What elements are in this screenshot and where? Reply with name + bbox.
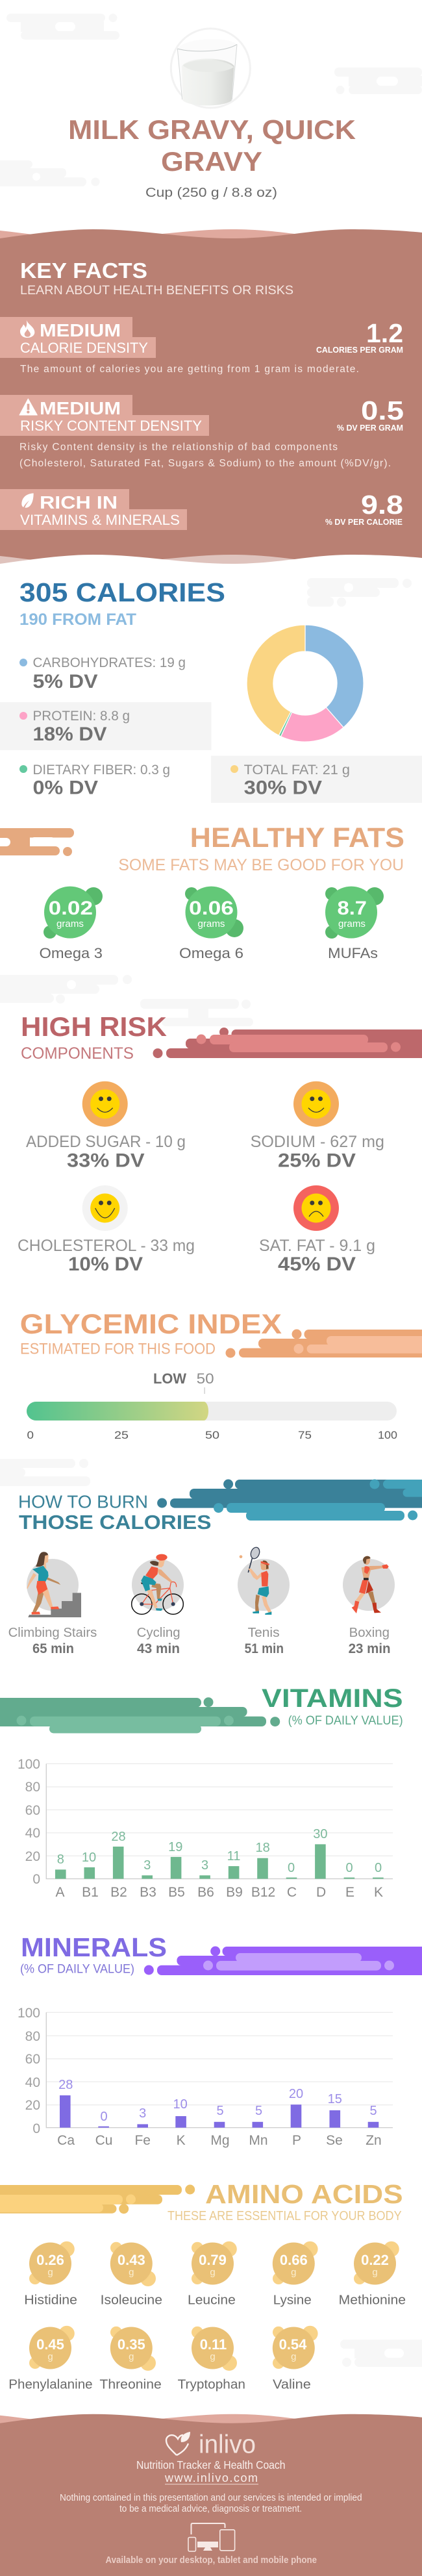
amino acid: leucine	[188, 2241, 237, 2308]
fact: rich in vitamins and minerals: RICH IN	[40, 492, 118, 512]
bar chart: vitamins: B2	[110, 1885, 127, 1900]
healthy fats subheading: SOME FATS MAY BE GOOD FOR YOU	[118, 856, 404, 874]
bar chart: vitamins: 8	[57, 1852, 64, 1867]
risk item: sodium: SODIUM - 627 mg	[251, 1133, 384, 1151]
bar chart: vitamins: 80	[25, 1780, 40, 1795]
activity: cycling	[132, 1554, 184, 1656]
bubble: MUFAs	[325, 887, 384, 961]
amino acid: isoleucine: g	[129, 2267, 134, 2278]
activity: cycling: 43 min	[137, 1641, 180, 1656]
bar chart: vitamins: 10	[82, 1850, 96, 1865]
bar chart: minerals: 0	[100, 2110, 108, 2124]
risk item: sodium	[251, 1081, 384, 1172]
bar chart: minerals: 5	[369, 2104, 377, 2118]
panel: how to burn those calories	[8, 1480, 422, 1656]
amino acid: threonine: g	[129, 2351, 134, 2362]
fact: risky content density: 0.5	[361, 396, 404, 425]
risk item: added sugar	[26, 1081, 186, 1172]
amino acid: histidine	[24, 2241, 77, 2308]
bar chart: vitamins: 3	[143, 1858, 151, 1873]
glycemic axis labels: 0	[27, 1429, 34, 1441]
panel: amino acids	[0, 2179, 406, 2392]
amino acid: methionine: Methionine	[339, 2293, 406, 2308]
icon: leaf	[21, 493, 34, 508]
bar chart: vitamins: 19	[168, 1840, 182, 1854]
vitamins subheading: (% OF DAILY VALUE)	[288, 1714, 403, 1728]
amino acid: lysine: Lysine	[273, 2293, 312, 2308]
bar chart: minerals: 10	[173, 2097, 188, 2112]
bar chart: vitamins: B3	[140, 1885, 156, 1900]
glycemic axis labels: 75	[298, 1429, 312, 1441]
serving size: Cup (250 g / 8.8 oz)	[145, 186, 277, 200]
minerals heading: MINERALS	[21, 1932, 167, 1962]
risk item: cholesterol	[18, 1185, 195, 1275]
disclaimer	[60, 2492, 362, 2514]
legend: carbohydrates	[19, 655, 186, 692]
background cloud: below glycemic index	[0, 1459, 90, 1486]
background cloud: calories	[307, 578, 412, 607]
bar chart: vitamins: 0	[345, 1861, 353, 1875]
fact: risky content density: Risky Content density is the relationship of bad components	[19, 442, 338, 453]
bar chart: minerals: 100	[18, 2006, 40, 2021]
disclaimer: to be a medical advice, diagnosis or treatment.	[119, 2503, 302, 2514]
bar chart: minerals: 60	[25, 2052, 40, 2067]
amino acid: valine	[273, 2326, 318, 2392]
glycemic index heading: GLYCEMIC INDEX	[20, 1309, 282, 1340]
risk item: saturated fat: SAT. FAT - 9.1 g	[259, 1237, 375, 1255]
fact: risky content density: MEDIUM	[40, 398, 121, 418]
bar chart: minerals: 20	[289, 2087, 303, 2101]
bar chart: minerals: 40	[25, 2075, 40, 2090]
burn heading line 2: THOSE CALORIES	[19, 1511, 212, 1534]
bar chart: vitamins: D	[316, 1885, 326, 1900]
activity: climbing stairs: 65 min	[32, 1641, 74, 1656]
fact: risky content density: RISKY CONTENT DENSITY	[20, 418, 202, 434]
bubble: omega 3: grams	[56, 918, 84, 929]
fact: risky content density: % DV PER GRAM	[337, 423, 403, 433]
amino acid: methionine	[339, 2241, 406, 2308]
bar chart: vitamins: 28	[111, 1830, 126, 1844]
panel: calories	[0, 577, 422, 803]
legend: protein	[19, 709, 130, 745]
amino acid: histidine: Histidine	[24, 2293, 77, 2308]
amino acids heading: AMINO ACIDS	[205, 2179, 403, 2209]
bar chart: minerals: 15	[328, 2092, 342, 2106]
legend: total fat	[230, 763, 350, 799]
availability note: Available on your desktop, tablet and mobile phone	[105, 2555, 317, 2566]
risk item: added sugar: 33% DV	[67, 1150, 145, 1172]
bar chart: vitamins: B5	[168, 1885, 185, 1900]
bar chart: vitamins: B9	[226, 1885, 243, 1900]
panel: vitamins	[0, 1684, 403, 1900]
bubble: omega 6	[179, 887, 243, 961]
bubble: omega 6: 0.06	[189, 898, 234, 919]
fact: calorie density	[0, 317, 403, 375]
risk item: cholesterol: 10% DV	[68, 1254, 143, 1275]
amino acid: isoleucine	[101, 2242, 162, 2308]
activity: boxing	[343, 1556, 395, 1656]
activity: cycling: Cycling	[137, 1626, 180, 1640]
risk item: cholesterol: CHOLESTEROL - 33 mg	[18, 1237, 195, 1255]
fact: risky content density: (Cholesterol, Saturated Fat, Sugars & Sodium) to the amount (%DV/gr).	[19, 458, 391, 469]
amino acid: phenylalanine: g	[47, 2351, 53, 2362]
bar chart: vitamins: 11	[227, 1849, 240, 1863]
fact: calorie density: CALORIES PER GRAM	[316, 346, 403, 355]
legend: protein: PROTEIN: 8.8 g	[32, 709, 130, 724]
panel: footer	[0, 2414, 422, 2576]
high risk heading: HIGH RISK	[21, 1011, 167, 1042]
bar chart: vitamins: B6	[197, 1885, 214, 1900]
healthy fats heading: HEALTHY FATS	[190, 822, 404, 853]
bar chart: minerals: Fe	[134, 2133, 151, 2148]
amino acid: valine: 0.54	[279, 2336, 307, 2353]
bar chart: vitamins: 18	[255, 1841, 270, 1855]
bar chart: minerals: 3	[139, 2106, 146, 2121]
calories from fat: 190 FROM FAT	[19, 611, 136, 629]
bar chart: minerals: Ca	[57, 2133, 75, 2148]
amino acid: isoleucine: 0.43	[118, 2252, 145, 2268]
bubble: MUFAs: 8.7	[338, 898, 367, 919]
calories heading: 305 CALORIES	[19, 577, 225, 607]
icon: devices	[188, 2523, 235, 2551]
glycemic value label	[153, 1370, 214, 1394]
fact: calorie density: 1.2	[366, 318, 403, 348]
bar chart: minerals: 80	[25, 2029, 40, 2044]
decorative banner: minerals	[144, 1946, 422, 1975]
amino acid: histidine: g	[47, 2267, 53, 2278]
decorative banner: vitamins	[0, 1697, 280, 1733]
disclaimer: Nothing contained in this presentation and our services is intended or implied	[60, 2492, 362, 2503]
logo: inlivo	[166, 2431, 256, 2459]
amino acid: leucine: 0.79	[199, 2252, 227, 2268]
bar chart: minerals: 0	[32, 2121, 40, 2136]
bar chart: minerals: 5	[255, 2104, 262, 2118]
risk item: added sugar: ADDED SUGAR - 10 g	[26, 1133, 186, 1151]
bubble: omega 6: Omega 6	[179, 945, 243, 961]
legend: dietary fiber	[19, 763, 170, 799]
background cloud: top left	[6, 14, 119, 40]
background cloud: top right	[334, 68, 422, 94]
amino acid: tryptophan: g	[210, 2351, 216, 2362]
panel: healthy fats	[0, 822, 404, 961]
food image: glass of milk	[171, 29, 250, 108]
bar chart: vitamins: 0	[32, 1872, 40, 1887]
amino acid: lysine: g	[291, 2267, 296, 2278]
vitamins heading: VITAMINS	[262, 1684, 403, 1713]
burn heading line 1: HOW TO BURN	[18, 1492, 148, 1512]
bar chart: minerals: Mg	[210, 2133, 230, 2148]
bar chart: minerals: K	[177, 2133, 186, 2148]
glycemic value label: 50	[197, 1370, 214, 1387]
amino acid: phenylalanine	[8, 2326, 93, 2392]
bar chart: vitamins: 3	[201, 1858, 208, 1873]
bubble: MUFAs: grams	[338, 918, 366, 929]
bubble: omega 3	[39, 887, 103, 961]
website: www.inlivo.com	[164, 2471, 258, 2484]
bubble: omega 3: 0.02	[49, 898, 93, 919]
bar chart: vitamins: B12	[251, 1885, 275, 1900]
amino acid: tryptophan	[178, 2327, 245, 2392]
icon: warning triangle	[19, 399, 37, 415]
bar chart: vitamins: 0	[375, 1861, 382, 1875]
activity: climbing stairs	[8, 1552, 97, 1656]
activity: tennis: Tenis	[248, 1626, 280, 1640]
glycemic axis labels: 50	[205, 1429, 219, 1441]
bar chart: vitamins: 0	[288, 1861, 295, 1875]
amino acid: leucine: g	[210, 2267, 216, 2278]
fact: risky content density	[0, 395, 404, 469]
title: GRAVY	[161, 146, 262, 177]
icon: flame	[20, 320, 34, 338]
amino acid: tryptophan: Tryptophan	[178, 2378, 245, 2392]
amino acid: methionine: g	[372, 2267, 378, 2278]
background cloud: left middle	[0, 160, 100, 186]
logo: inlivo: inlivo	[199, 2431, 256, 2459]
legend: dietary fiber: 0% DV	[32, 777, 98, 799]
bar chart: vitamins: 100	[18, 1757, 40, 1772]
decorative banner: burn calories	[157, 1480, 422, 1521]
amino acids subheading: THESE ARE ESSENTIAL FOR YOUR BODY	[168, 2209, 402, 2223]
bar chart: minerals: Zn	[366, 2133, 382, 2148]
glycemic axis labels	[27, 1429, 397, 1441]
panel: minerals	[18, 1932, 422, 2148]
amino acid: threonine	[99, 2327, 162, 2392]
fact: calorie density: The amount of calories you are getting from 1 gram is moderate.	[20, 364, 359, 375]
activity: climbing stairs: Climbing Stairs	[8, 1626, 97, 1640]
tagline: Nutrition Tracker & Health Coach	[136, 2458, 286, 2471]
decorative banner: healthy fats	[0, 828, 74, 856]
amino acid: leucine: Leucine	[188, 2293, 236, 2308]
decorative banner: high risk	[153, 1028, 422, 1058]
fact: rich in vitamins and minerals: VITAMINS & MINERALS	[20, 512, 180, 528]
glycemic axis labels: 25	[114, 1429, 129, 1441]
amino acid: lysine	[273, 2241, 318, 2308]
donut chart	[247, 625, 364, 742]
amino acid: phenylalanine: 0.45	[36, 2336, 64, 2353]
panel: key facts	[0, 229, 422, 573]
panel: high risk components	[18, 1011, 422, 1275]
bar chart: minerals	[18, 2006, 393, 2148]
activity: tennis	[238, 1546, 290, 1656]
amino acid: valine: Valine	[273, 2378, 311, 2392]
fact: rich in vitamins and minerals: % DV PER CALORIE	[325, 518, 403, 527]
bubble: omega 3: Omega 3	[39, 945, 103, 961]
activity: tennis: 51 min	[245, 1641, 284, 1656]
title	[68, 114, 356, 177]
background cloud: amino acids	[340, 2340, 422, 2367]
legend: total fat: 30% DV	[244, 777, 322, 799]
bar chart: vitamins: E	[345, 1885, 354, 1900]
bar chart: vitamins: C	[287, 1885, 297, 1900]
bar chart: minerals: P	[292, 2133, 301, 2148]
glycemic axis labels: 100	[378, 1429, 397, 1441]
bar chart: minerals: 5	[216, 2104, 224, 2118]
amino acid: tryptophan: 0.11	[200, 2336, 227, 2353]
amino acid: isoleucine: Isoleucine	[101, 2293, 162, 2308]
activity: boxing: 23 min	[349, 1641, 391, 1656]
amino acid: threonine: 0.35	[118, 2336, 145, 2353]
decorative banner: amino acids	[0, 2185, 195, 2214]
legend: carbohydrates: CARBOHYDRATES: 19 g	[32, 655, 186, 670]
glycemic index bar	[27, 1402, 397, 1421]
background cloud: below healthy fats left	[0, 975, 132, 1004]
bar chart: vitamins: K	[374, 1885, 383, 1900]
title: MILK GRAVY, QUICK	[68, 114, 356, 145]
bar chart: vitamins: 40	[25, 1826, 40, 1841]
panel: glycemic index	[20, 1309, 422, 1441]
fact: calorie density: CALORIE DENSITY	[20, 340, 148, 356]
bar chart: vitamins: 30	[313, 1827, 328, 1841]
key facts subheading: LEARN ABOUT HEALTH BENEFITS OR RISKS	[20, 284, 293, 297]
background cloud: below healthy fats center	[140, 999, 253, 1026]
fact: calorie density: MEDIUM	[40, 320, 121, 340]
legend: dietary fiber: DIETARY FIBER: 0.3 g	[32, 763, 170, 777]
bar chart: vitamins: 60	[25, 1803, 40, 1818]
glycemic value label: LOW	[153, 1370, 186, 1387]
high risk subheading: COMPONENTS	[21, 1044, 134, 1063]
bar chart: vitamins: 20	[25, 1849, 40, 1864]
legend: carbohydrates: 5% DV	[32, 671, 97, 692]
fact: rich in vitamins and minerals: 9.8	[361, 490, 403, 520]
amino acid: lysine: 0.66	[280, 2252, 308, 2268]
legend: total fat: TOTAL FAT: 21 g	[244, 763, 350, 777]
bar chart: vitamins: B1	[82, 1885, 99, 1900]
glycemic index subheading: ESTIMATED FOR THIS FOOD	[20, 1341, 216, 1357]
amino acid: threonine: Threonine	[99, 2378, 162, 2392]
risk item: sodium: 25% DV	[278, 1150, 356, 1172]
bar chart: minerals: Mn	[249, 2133, 268, 2148]
amino acid: phenylalanine: Phenylalanine	[8, 2378, 93, 2392]
activity: boxing: Boxing	[349, 1626, 390, 1640]
bubble: omega 6: grams	[197, 918, 225, 929]
risk item: saturated fat: 45% DV	[278, 1254, 356, 1275]
bar chart: minerals: Cu	[95, 2133, 112, 2148]
amino acid: histidine: 0.26	[36, 2252, 64, 2268]
bar chart: minerals: Se	[326, 2133, 343, 2148]
risk item: saturated fat	[259, 1185, 375, 1275]
minerals subheading: (% OF DAILY VALUE)	[20, 1963, 134, 1976]
key facts heading: KEY FACTS	[20, 259, 147, 283]
bar chart: vitamins	[18, 1757, 393, 1900]
decorative banner: glycemic index	[226, 1329, 422, 1357]
bar chart: minerals: 20	[25, 2098, 40, 2113]
amino acid: valine: g	[291, 2351, 296, 2362]
fact: rich in vitamins and minerals	[0, 489, 403, 530]
amino acid: methionine: 0.22	[361, 2252, 389, 2268]
bar chart: minerals: 28	[58, 2078, 73, 2092]
bar chart: vitamins: A	[55, 1885, 65, 1900]
bubble: MUFAs: MUFAs	[328, 945, 378, 961]
legend: protein: 18% DV	[32, 724, 106, 745]
